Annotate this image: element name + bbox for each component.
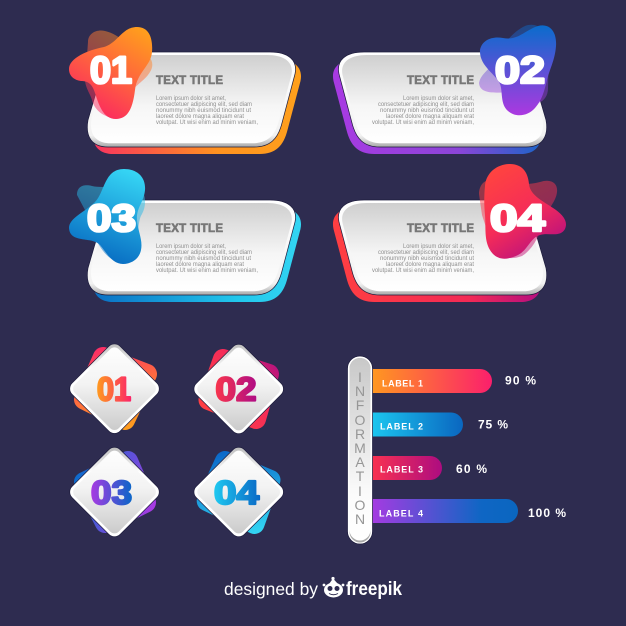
blob: 02: 02 <box>495 50 545 92</box>
blob: 04: 04 <box>490 198 545 240</box>
text block: laoreet dolore magna aliquam erat <box>386 114 474 120</box>
blob: 03: 03 <box>87 198 136 240</box>
badge: diamond 01: 01 <box>97 370 131 408</box>
text block: Lorem ipsum dolor sit amet, <box>403 96 474 102</box>
vertical pill: information: N <box>355 383 365 399</box>
vertical pill: information: T <box>356 468 365 484</box>
text block: nonummy nibh euismod tincidunt ut <box>380 108 474 114</box>
text block: laoreet dolore magna aliquam erat <box>156 114 244 120</box>
bar: label 3 <box>370 456 487 480</box>
title: TEXT TITLE <box>407 223 474 235</box>
vertical pill: information: I <box>358 483 362 499</box>
bar: label 1: 90 % <box>505 374 536 388</box>
blob: 04 <box>479 164 566 259</box>
bar: label 2: LABEL 2 <box>380 422 423 432</box>
badge: diamond 03 <box>66 444 163 540</box>
text block: laoreet dolore magna aliquam erat <box>386 262 474 268</box>
vertical pill: information: O <box>355 497 366 513</box>
vertical pill: information: R <box>355 426 365 442</box>
bar: label 2: 75 % <box>478 418 508 432</box>
badge: diamond 04: 04 <box>214 474 260 511</box>
icon: freepik mascot <box>323 577 344 598</box>
text block: consectetuer adipiscing elit, sed diam <box>378 250 474 256</box>
vertical pill: information: F <box>356 397 364 413</box>
badge: diamond 02 <box>191 341 287 437</box>
bar: label 4: 100 % <box>528 506 566 520</box>
blob: 02 <box>479 25 556 115</box>
title: TEXT TITLE <box>407 75 474 87</box>
footer: designed by freepik: freepik <box>346 579 402 600</box>
panel: card 04 <box>333 164 566 302</box>
text block: nonummy nibh euismod tincidunt ut <box>380 256 474 262</box>
text block: Lorem ipsum dolor sit amet, <box>156 244 226 250</box>
vertical pill: information <box>348 356 372 544</box>
badge: diamond 02: 02 <box>216 370 256 408</box>
text block: volutpat. Ut wisi enim ad minim veniam, <box>372 120 474 126</box>
text block: volutpat. Ut wisi enim ad minim veniam, <box>372 268 474 274</box>
bar: label 4 <box>370 499 566 523</box>
vertical pill: information: A <box>355 454 365 470</box>
bar: label 3: LABEL 3 <box>380 464 423 474</box>
footer: designed by freepik: designed by <box>224 579 318 599</box>
text block: volutpat. Ut wisi enim ad minim veniam, <box>156 120 258 126</box>
panel: card 03 <box>69 169 301 302</box>
bar: label 3: 60 % <box>456 462 487 476</box>
text block: Lorem ipsum dolor sit amet, <box>156 96 226 102</box>
vertical pill: information: N <box>355 511 365 527</box>
text block: Lorem ipsum dolor sit amet, <box>403 244 474 250</box>
vertical pill: information: O <box>355 412 366 428</box>
blob: 01 <box>69 27 152 119</box>
vertical pill: information: I <box>358 369 362 385</box>
text block: consectetuer adipiscing elit, sed diam <box>156 250 252 256</box>
badge: diamond 03: 03 <box>91 474 132 511</box>
text block <box>156 96 258 126</box>
vertical pill: information: M <box>354 440 366 456</box>
bar chart: information <box>348 356 566 544</box>
bar: label 4: LABEL 4 <box>379 508 423 518</box>
text block: laoreet dolore magna aliquam erat <box>156 262 244 268</box>
text block: nonummy nibh euismod tincidunt ut <box>156 108 251 114</box>
bar: label 1 <box>370 369 536 393</box>
text block <box>372 96 474 126</box>
text block: volutpat. Ut wisi enim ad minim veniam, <box>156 268 258 274</box>
panel: card 01 <box>69 27 301 154</box>
bar: label 2 <box>370 412 508 436</box>
text block: consectetuer adipiscing elit, sed diam <box>156 102 252 108</box>
blob: 03 <box>69 169 145 264</box>
blob: 01: 01 <box>90 50 132 92</box>
title: TEXT TITLE <box>156 75 223 87</box>
text block <box>372 244 474 274</box>
footer: designed by freepik <box>224 577 402 600</box>
badge: diamond 01 <box>66 341 163 437</box>
text block <box>156 244 258 274</box>
bar: label 1: LABEL 1 <box>382 378 423 388</box>
text block: nonummy nibh euismod tincidunt ut <box>156 256 251 262</box>
text block: consectetuer adipiscing elit, sed diam <box>378 102 474 108</box>
title: TEXT TITLE <box>156 223 223 235</box>
badge: diamond 04 <box>191 444 287 540</box>
panel: card 02 <box>333 25 556 154</box>
